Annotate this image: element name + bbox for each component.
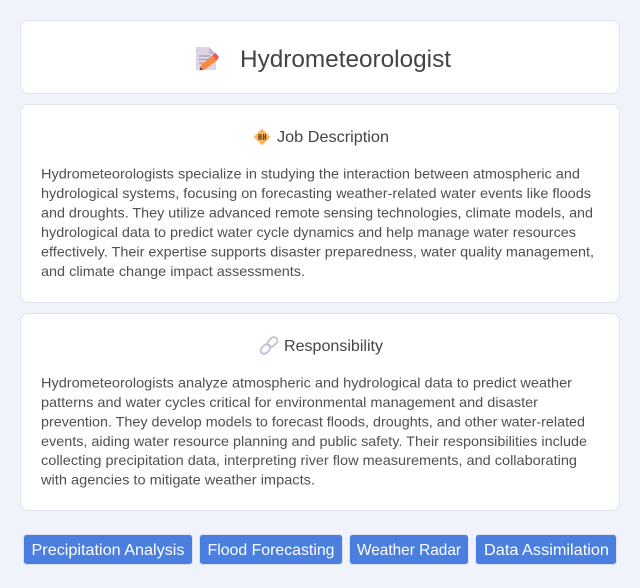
icon: link — [259, 336, 279, 355]
responsibility text: events, aiding water resource planning and public safety. Their responsibilities include — [41, 433, 587, 449]
responsibility text: patterns and water cycles critical for environmental management and disaster — [41, 394, 538, 410]
job description text: and droughts. They utilize advanced remote sensing technologies, climate models, and — [41, 204, 593, 220]
icon: document with pencil — [196, 47, 219, 70]
tag: weather radar: Weather Radar — [357, 542, 462, 559]
job description text: effectively. Their expertise supports disaster preparedness, water quality management, — [41, 244, 594, 260]
responsibility text: collecting precipitation data, interpreting river flow measurements, and collaborating — [41, 452, 577, 468]
skill tags — [24, 534, 616, 564]
icon: diamond sign — [254, 129, 270, 145]
job description text: Hydrometeorologists specialize in studying the interaction between atmospheric and — [41, 166, 580, 182]
tag: precipitation analysis: Precipitation Analysis — [32, 542, 184, 559]
tag: flood forecasting — [200, 534, 342, 564]
job description text: hydrological data to predict water cycle dynamics and help manage water resources — [41, 224, 576, 240]
responsibility text: prevention. They develop models to forecast floods, droughts, and other water-related — [41, 414, 585, 430]
panel: title — [20, 20, 620, 94]
tag: data assimilation: Data Assimilation — [484, 542, 609, 559]
job description text — [41, 166, 594, 279]
panel: responsibility — [20, 314, 620, 510]
responsibility text — [40, 374, 587, 488]
tag: flood forecasting: Flood Forecasting — [208, 542, 334, 559]
tag: data assimilation — [476, 534, 616, 564]
job description text: and climate change impact assessments. — [41, 263, 305, 279]
responsibility text: with agencies to mitigate weather impacts. — [40, 472, 315, 488]
title text: Hydrometeorologist — [240, 46, 451, 73]
panel: job description — [20, 104, 620, 302]
heading: job description: Job Description — [277, 129, 389, 146]
job description text: hydrological systems, focusing on forecasting weather-related water events like floods — [41, 185, 591, 201]
heading: responsibility: Responsibility — [284, 338, 383, 355]
tag: precipitation analysis — [24, 534, 192, 564]
tag: weather radar — [350, 534, 468, 564]
responsibility text: Hydrometeorologists analyze atmospheric and hydrological data to predict weather — [41, 374, 572, 390]
